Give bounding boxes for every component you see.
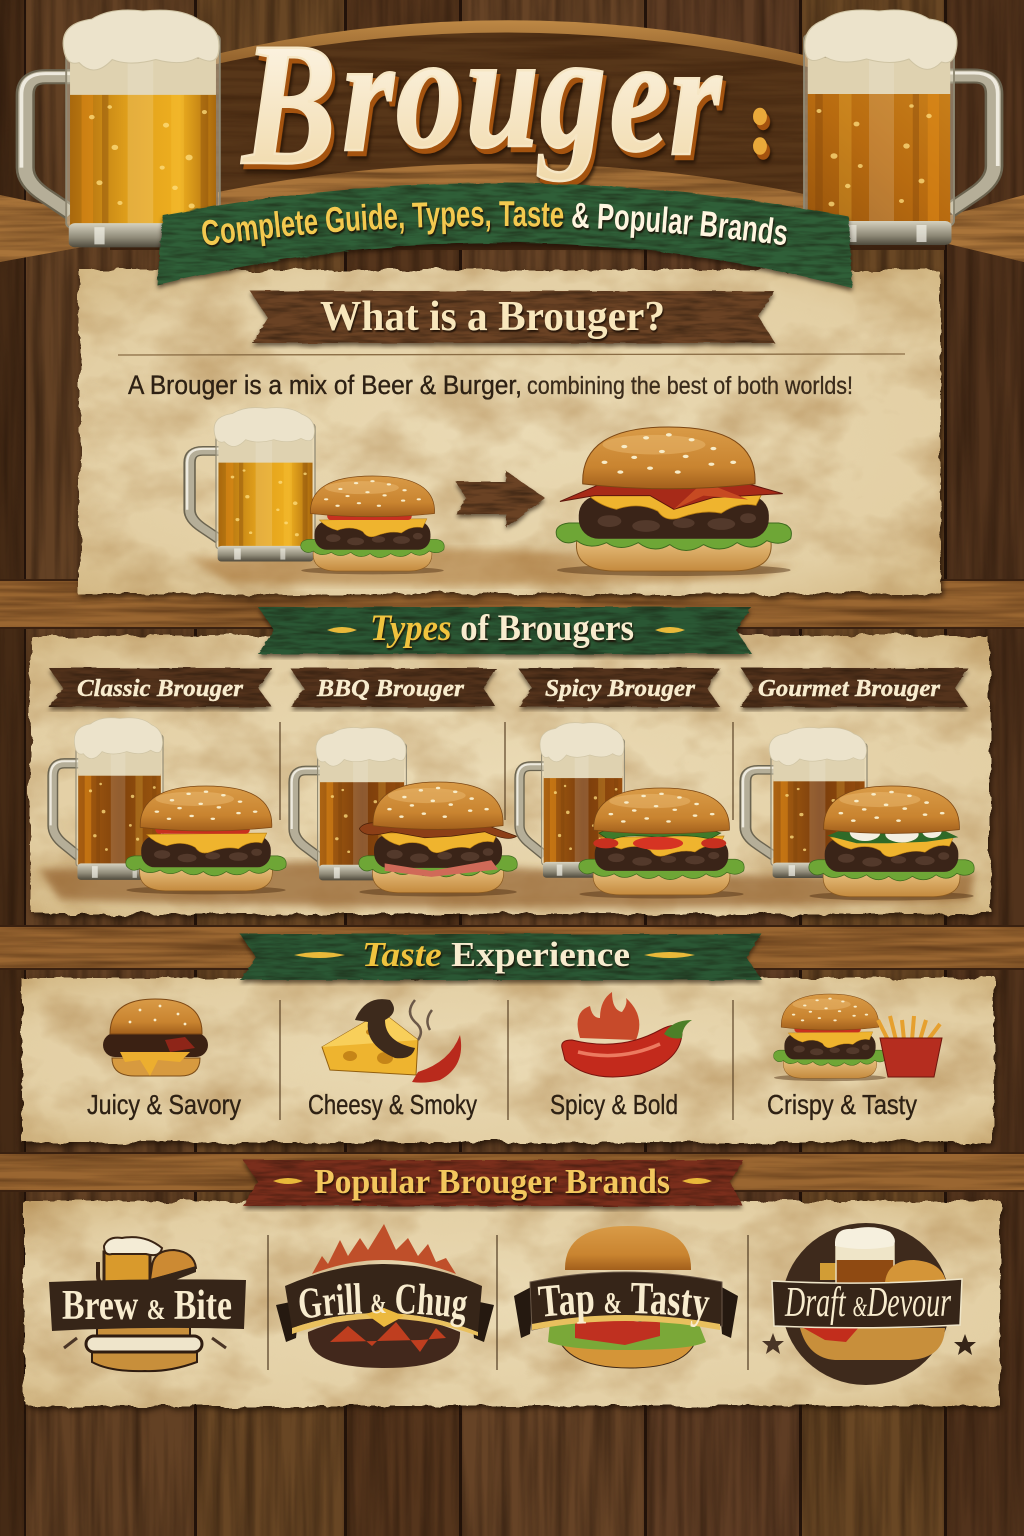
- wood beam 3: [0, 926, 1024, 969]
- panel: taste experience: [22, 978, 994, 1142]
- side beams behind title: [0, 195, 1024, 262]
- brand: grill and chug: [276, 1224, 494, 1368]
- wood beam 4: [0, 1153, 1024, 1191]
- title text: Brouger :: [241, 0, 773, 202]
- types divider lines: [280, 722, 733, 820]
- taste: spicy and bold: Spicy & Bold: [550, 1089, 678, 1120]
- definition text: combining the best of both worlds!: [527, 372, 853, 400]
- heading ribbon: types of brougers: Types of Brougers: [370, 608, 634, 649]
- card: bbq brouger: [290, 668, 517, 896]
- taste: juicy and savory: Juicy & Savory: [87, 1089, 241, 1120]
- brand: tap and tasty: Tap & Tasty: [538, 1282, 710, 1327]
- beer mug: [187, 408, 315, 562]
- heading ribbon: popular brands: [243, 1160, 743, 1206]
- heading ribbon: What is a Brouger: What is a Brouger?: [320, 294, 665, 340]
- taste: cheesy and smoky: [308, 999, 477, 1120]
- taste divider lines: [280, 1000, 733, 1120]
- definition text: A Brouger is a mix of Beer & Burger,: [128, 370, 522, 400]
- heading ribbon: taste experience: Taste Experience: [362, 935, 630, 974]
- brand divider lines: [268, 1235, 748, 1370]
- card: bbq brouger: BBQ Brouger: [316, 676, 465, 702]
- heading ribbon: What is a Brouger: [250, 291, 775, 343]
- card: classic brouger: Classic Brouger: [77, 676, 244, 702]
- panel: popular brands: [22, 1198, 1006, 1414]
- taste: spicy and bold: [550, 992, 692, 1120]
- brand: tap and tasty: [514, 1226, 738, 1368]
- heading ribbon: popular brands: Popular Brouger Brands: [314, 1162, 670, 1201]
- arrow: [456, 471, 545, 527]
- brand: brew and bite: Brew & Bite: [62, 1283, 232, 1329]
- card: gourmet brouger: [740, 668, 974, 900]
- wood beam 2: [0, 580, 1024, 628]
- panel: types of brougers: [30, 636, 990, 914]
- heading ribbon: taste experience: [240, 934, 762, 980]
- taste: juicy and savory: [87, 999, 241, 1120]
- subtitle ribbon: [154, 182, 856, 294]
- brand: draft and devour: Draft &Devour: [784, 1280, 951, 1326]
- panel: what is a brouger: [80, 270, 940, 594]
- definition text: [118, 354, 905, 400]
- small burger: [301, 476, 444, 574]
- subtitle text: Complete Guide, Types, Taste & Popular Brands: [202, 201, 788, 249]
- card: classic brouger: [48, 668, 286, 894]
- brand: brew and bite: [49, 1237, 246, 1371]
- heading ribbon: types of brougers: [258, 607, 752, 654]
- card: spicy brouger: [517, 668, 744, 899]
- taste: crispy and tasty: Crispy & Tasty: [767, 1089, 917, 1120]
- left beer mug: [21, 10, 220, 247]
- large burger: [556, 427, 791, 576]
- card: gourmet brouger: Gourmet Brouger: [758, 676, 941, 702]
- table stain: [190, 549, 800, 585]
- right beer mug: [804, 10, 998, 245]
- brand: grill and chug: Grill & Chug: [300, 1283, 468, 1328]
- brand: draft and devour: [762, 1223, 976, 1385]
- table stain: [40, 862, 975, 908]
- card: spicy brouger: Spicy Brouger: [545, 676, 696, 702]
- taste: crispy and tasty: [767, 994, 942, 1120]
- title plaque: [212, 20, 808, 212]
- taste: cheesy and smoky: Cheesy & Smoky: [308, 1089, 477, 1120]
